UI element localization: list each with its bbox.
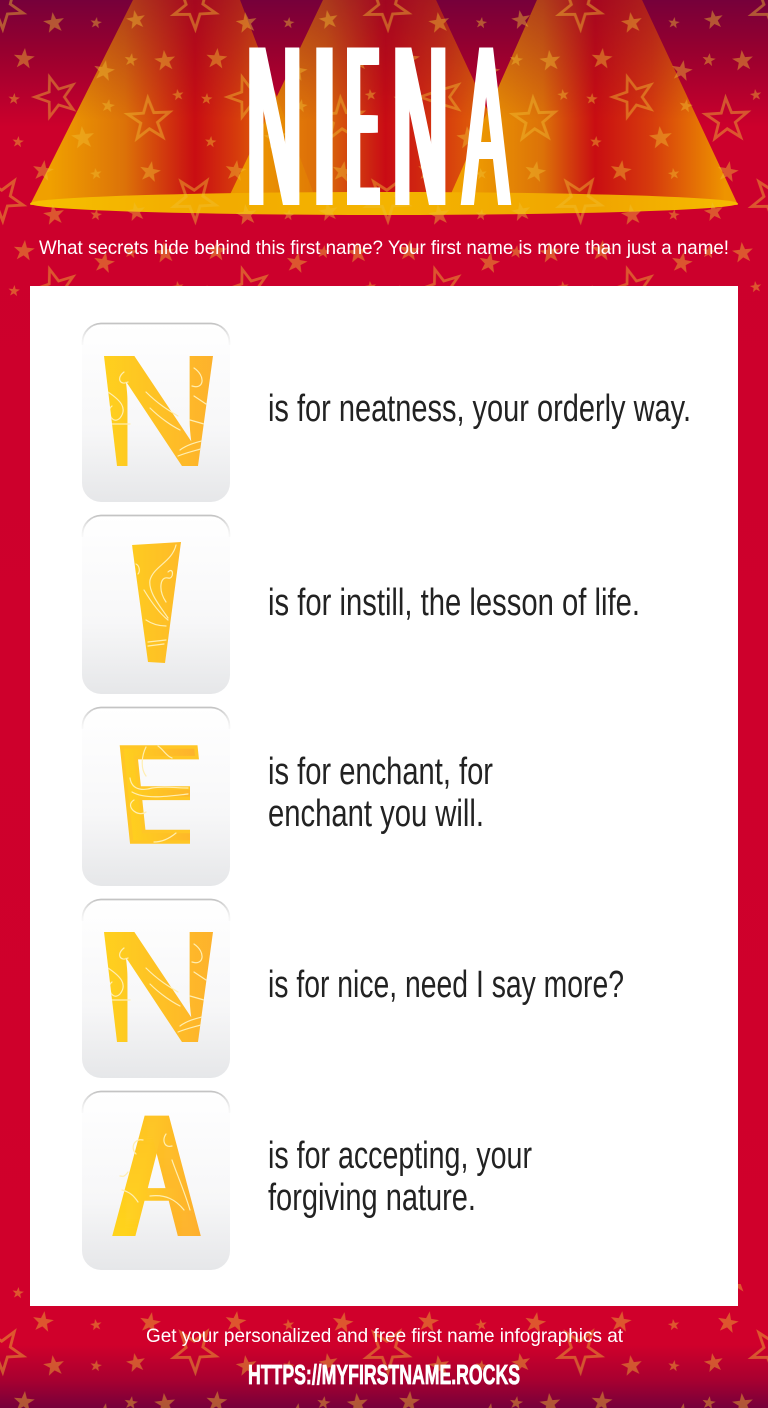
spotlight floor (30, 192, 738, 215)
title: N (393, 0, 448, 254)
title: E (348, 0, 377, 254)
tagline: What secrets hide behind this first name? Your first name is more than just a name! (39, 237, 729, 259)
star pattern top (0, 0, 768, 299)
tile I (82, 504, 230, 701)
title: N (247, 0, 302, 254)
letter N (104, 932, 213, 1042)
title: A (464, 0, 508, 254)
letter A: A (118, 1079, 195, 1274)
row: A accepting: forgiving nature. (268, 1177, 476, 1219)
row: I instill (82, 504, 640, 701)
title: I (313, 0, 335, 254)
letter N: N (91, 321, 226, 500)
spotlights (30, 0, 738, 215)
letter E (120, 745, 199, 844)
panel: letters (30, 286, 738, 1306)
row: N nice (82, 897, 624, 1078)
tile N (82, 897, 230, 1078)
title (247, 0, 512, 254)
text: E lines: is for enchant, for (268, 751, 493, 793)
row: N neatness (82, 321, 691, 502)
row: E enchant (82, 707, 493, 886)
text: N line: is for nice, need I say more? (268, 964, 624, 1006)
tile E (82, 707, 230, 886)
text: I line: is for instill, the lesson of life. (268, 582, 640, 624)
letter I: I (105, 504, 217, 701)
spotlight middle (225, 0, 532, 205)
footer url: HTTPS://MYFIRSTNAME.ROCKS (248, 1359, 520, 1390)
row: A accepting (82, 1079, 532, 1274)
tile N (82, 321, 230, 502)
letter N: N (91, 897, 226, 1076)
text: A lines: is for accepting, your (268, 1135, 532, 1177)
footer line: Get your personalized and free first name infographics at (146, 1325, 624, 1347)
star pattern bottom (0, 1284, 768, 1408)
spotlight left (30, 0, 318, 205)
letter E: E (107, 717, 218, 871)
tile A (82, 1079, 230, 1274)
letter N (104, 356, 213, 466)
spotlight right (446, 0, 738, 205)
letter I (132, 542, 181, 663)
row: E enchant: enchant you will. (268, 793, 484, 835)
